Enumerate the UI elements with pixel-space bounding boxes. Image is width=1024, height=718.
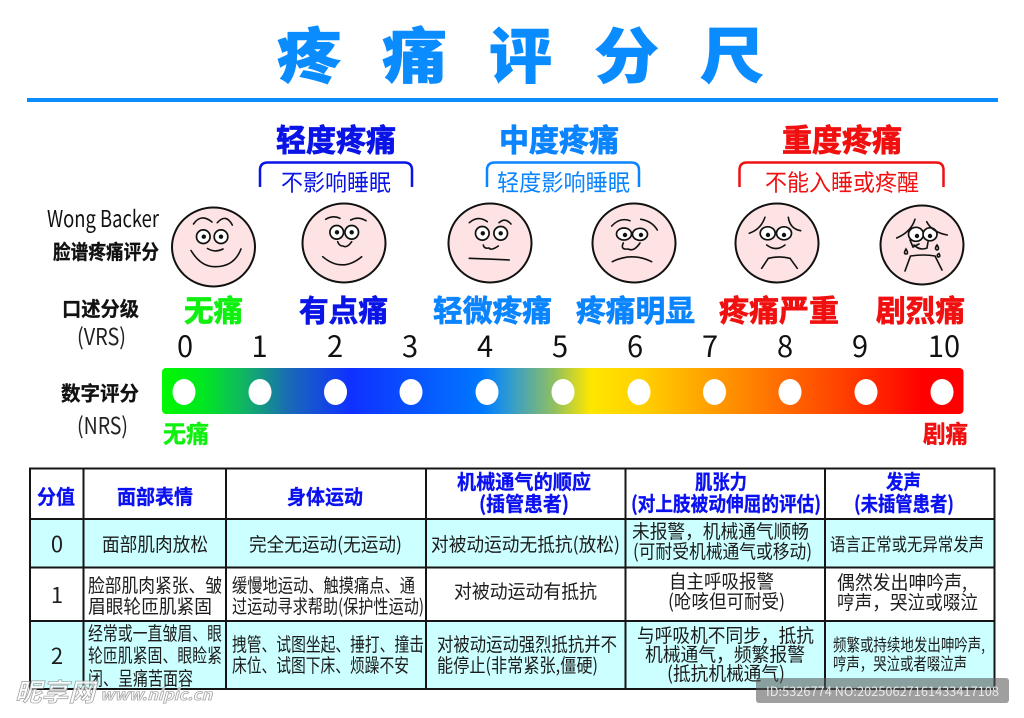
table header row: 机械通气的顺应 xyxy=(457,466,591,495)
numeric scale digits: 2 xyxy=(327,324,343,366)
numeric scale digits: 9 xyxy=(852,324,868,366)
numeric scale digits xyxy=(177,324,960,366)
table row: score 1: 对被动运动有抵抗 xyxy=(454,577,597,604)
numeric scale digits: 7 xyxy=(702,324,718,366)
title: 疼 xyxy=(277,9,341,96)
watermark: site logo: 昵享网 xyxy=(15,673,99,709)
watermark: site logo xyxy=(15,673,214,709)
table row: score 1: 眉眼轮匝肌紧固 xyxy=(88,592,212,619)
table row: score 2: 闭、呈痛苦面容 xyxy=(88,664,193,691)
label: verbal rating scale: 口述分级 xyxy=(62,293,139,322)
verbal scale labels xyxy=(184,286,965,330)
table header row: 发声 xyxy=(886,466,921,495)
icon: face 5 crying xyxy=(880,206,964,284)
panel: moderate pain group: 轻度影响睡眠 xyxy=(497,164,630,198)
verbal scale labels: 剧烈痛 xyxy=(876,286,965,330)
table header row: 身体运动 xyxy=(287,481,363,510)
table row: score 1: (呛咳但可耐受) xyxy=(668,587,785,614)
numeric scale digits: 6 xyxy=(627,324,643,366)
verbal scale labels: 疼痛明显 xyxy=(576,286,695,330)
table row: score 0: 语言正常或无异常发声 xyxy=(830,531,984,557)
table row: score 2: 2 xyxy=(51,639,63,671)
icon: face 2 neutral xyxy=(448,204,532,282)
label: numeric rating scale: (NRS) xyxy=(77,407,128,441)
numeric scale digits: 10 xyxy=(928,324,960,366)
table row: score 1 xyxy=(51,567,978,619)
table header row: (未插管患者) xyxy=(854,488,954,517)
panel: mild pain group: 轻度疼痛 xyxy=(276,116,396,160)
title: 尺 xyxy=(700,9,764,96)
table header row: 肌张力 xyxy=(695,466,747,495)
table row: score 2: (抵抗机械通气) xyxy=(667,659,785,686)
bar end label: no pain: 无痛 xyxy=(163,414,209,450)
table: behavioral pain scale xyxy=(30,466,994,691)
table row: score 2: 床位、试图下床、烦躁不安 xyxy=(232,651,409,678)
label: Wong Backer face scale: 脸谱疼痛评分 xyxy=(53,236,159,265)
icon: face 3 frowning xyxy=(592,204,676,282)
table header row: (对上肢被动伸屈的评估) xyxy=(631,488,821,517)
watermark: image id badge: ID:5326774 NO:20250627161433417108 xyxy=(766,681,999,700)
numeric scale digits: 4 xyxy=(477,324,493,366)
table header row: 面部表情 xyxy=(117,481,193,510)
label: Wong Backer face scale: Wong Backer xyxy=(47,200,159,234)
label: verbal rating scale: (VRS) xyxy=(77,318,126,352)
table row: score 2: 拽管、试图坐起、捶打、撞击 xyxy=(232,630,424,657)
title: 分 xyxy=(594,9,659,96)
bar end label: severe pain: 剧痛 xyxy=(923,414,968,450)
table row: score 2: 能停止(非常紧张,僵硬) xyxy=(437,651,598,678)
label: numeric rating scale xyxy=(61,378,139,441)
table row: score 2: 对被动运动强烈抵抗并不 xyxy=(437,630,617,657)
table row: score 0 xyxy=(51,517,984,564)
table row: score 1: 哼声，哭泣或啜泣 xyxy=(837,588,978,615)
title: 评 xyxy=(489,9,552,96)
verbal scale labels: 轻微疼痛 xyxy=(433,286,552,330)
table row: score 2: 机械通气，频繁报警 xyxy=(645,640,805,667)
panel: severe pain group xyxy=(740,116,944,198)
panel: severe pain group: 重度疼痛 xyxy=(782,116,902,160)
title: 痛 xyxy=(382,9,447,96)
table row: score 1: 缓慢地运动、触摸痛点、通 xyxy=(232,571,415,598)
table row: score 0: 0 xyxy=(51,527,63,559)
table row: score 2: 哼声，哭泣或者啜泣声 xyxy=(833,650,967,675)
numeric scale digits: 8 xyxy=(777,324,793,366)
panel: moderate pain group: 中度疼痛 xyxy=(499,116,619,160)
verbal scale labels: 有点痛 xyxy=(299,286,388,330)
numeric scale digits: 0 xyxy=(177,324,193,366)
table row: score 0: (可耐受机械通气或移动) xyxy=(633,537,812,564)
table row: score 2 xyxy=(51,619,985,691)
label: Wong Backer face scale xyxy=(47,200,159,265)
table row: score 1: 偶然发出呻吟声, xyxy=(837,568,967,595)
table row: score 0: 对被动运动无抵抗(放松) xyxy=(431,530,620,557)
table row: score 2: 经常或一直皱眉、眼 xyxy=(88,619,222,646)
gradient scale bar xyxy=(162,368,964,414)
title xyxy=(277,9,764,96)
table row: score 1: 自主呼吸报警 xyxy=(669,567,774,594)
label: verbal rating scale xyxy=(62,293,139,352)
table header row xyxy=(37,466,954,517)
numeric scale digits: 1 xyxy=(251,324,268,366)
icon: face 0 smiling xyxy=(172,208,255,286)
table row: score 2: 与呼吸机不同步，抵抗 xyxy=(637,621,814,648)
table row: score 1: 脸部肌肉紧张、皱 xyxy=(88,571,222,598)
icon: face 1 slight smile xyxy=(302,204,386,282)
icon: face 4 severe pain xyxy=(736,204,818,282)
table header row: 分值 xyxy=(37,481,75,510)
table row: score 2: 频繁或持续地发出呻吟声, xyxy=(833,631,985,656)
table row: score 1: 1 xyxy=(51,578,63,610)
table row: score 1: 过运动寻求帮助(保护性运动) xyxy=(232,592,424,619)
panel: severe pain group: 不能入睡或疼醒 xyxy=(765,164,919,198)
verbal scale labels: 无痛 xyxy=(184,286,243,330)
table header row: (插管患者) xyxy=(479,488,569,517)
label: numeric rating scale: 数字评分 xyxy=(61,378,139,406)
table row: score 0: 未报警，机械通气顺畅 xyxy=(632,517,809,544)
watermark: site logo: www.nipic.cn xyxy=(100,684,214,705)
panel: moderate pain group xyxy=(487,116,639,198)
table row: score 2: 轮匝肌紧固、眼睑紧 xyxy=(88,641,222,668)
table row: score 0: 面部肌肉放松 xyxy=(102,530,208,557)
numeric scale digits: 3 xyxy=(402,324,418,366)
verbal scale labels: 疼痛严重 xyxy=(719,286,839,330)
numeric scale digits: 5 xyxy=(552,324,568,366)
table row: score 0: 完全无运动(无运动) xyxy=(249,530,402,557)
panel: mild pain group xyxy=(260,116,412,198)
panel: mild pain group: 不影响睡眠 xyxy=(281,164,391,198)
